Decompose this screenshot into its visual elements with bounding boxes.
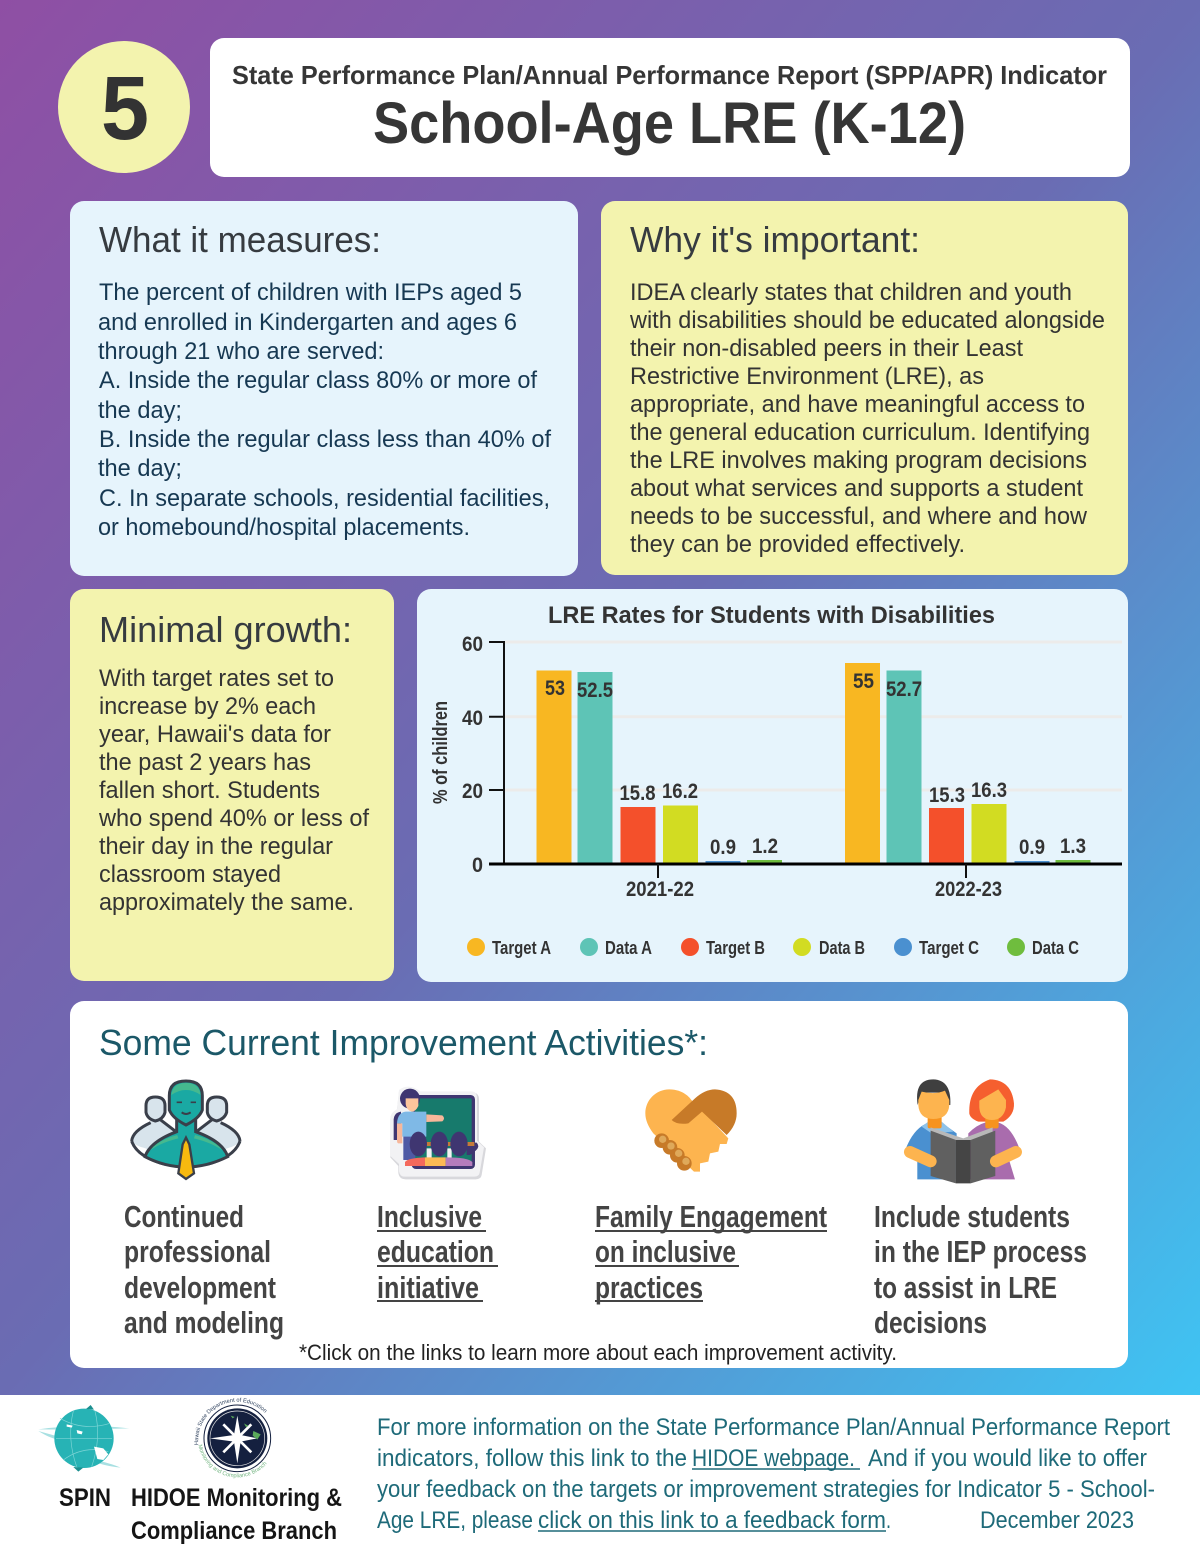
footer information text: . bbox=[886, 1507, 891, 1534]
data labels: 15.8 bbox=[620, 782, 656, 805]
panel: what it measures: and enrolled in Kindergarten and ages 6 bbox=[98, 309, 517, 336]
data labels: 53 bbox=[545, 677, 565, 700]
activity: professional development: and modeling bbox=[124, 1305, 284, 1340]
activity: include students bbox=[874, 1199, 1087, 1340]
data labels: 1.2 bbox=[752, 835, 778, 858]
legend: Target C bbox=[919, 938, 979, 958]
activity: family engagement: Family Engagement bbox=[595, 1199, 827, 1234]
footer information text: December 2023 bbox=[980, 1507, 1134, 1534]
y axis: 60 bbox=[462, 633, 483, 656]
activity: inclusive education: Inclusive bbox=[377, 1199, 482, 1234]
activity: include students: in the IEP process bbox=[874, 1234, 1087, 1269]
activity: inclusive education bbox=[377, 1199, 498, 1305]
legend: Target B bbox=[706, 938, 765, 958]
activity: family engagement: on inclusive bbox=[595, 1234, 736, 1269]
panel: what it measures: the day; bbox=[98, 397, 182, 424]
panel: why it's important: Why it's important: bbox=[630, 219, 920, 260]
panel: why it's important: needs to be successful, and where and how bbox=[630, 503, 1088, 530]
data labels: 55 bbox=[853, 670, 874, 693]
footer information text: HIDOE webpage. bbox=[692, 1445, 855, 1472]
panel: why it's important: Restrictive Environment (LRE), as bbox=[630, 363, 984, 390]
panel: why it's important: the general education curriculum. Identifying bbox=[630, 419, 1090, 446]
activity: professional development: professional bbox=[124, 1234, 271, 1269]
activity: include students: to assist in LRE bbox=[874, 1270, 1057, 1305]
logo labels: HIDOE Monitoring & bbox=[131, 1484, 342, 1512]
data labels: 15.3 bbox=[929, 784, 965, 807]
indicator number badge bbox=[58, 41, 190, 173]
indicator number badge: 5 bbox=[101, 59, 149, 159]
y axis bbox=[430, 633, 504, 877]
logo labels: SPIN bbox=[59, 1484, 111, 1512]
icon: heart handshake bbox=[645, 1089, 737, 1172]
icon: teacher and students bbox=[390, 1087, 486, 1179]
panel: minimal growth: Minimal growth: bbox=[99, 609, 352, 650]
y axis: 20 bbox=[462, 780, 483, 803]
activity: family engagement bbox=[595, 1199, 827, 1305]
legend: Data B bbox=[819, 938, 865, 958]
panel: minimal growth: classroom stayed bbox=[99, 861, 281, 888]
panel: why it's important: appropriate, and have meaningful access to bbox=[630, 391, 1085, 418]
activity: inclusive education: education bbox=[377, 1234, 494, 1269]
footer information text: Age LRE, please bbox=[377, 1507, 533, 1534]
icon: professional group bbox=[132, 1081, 240, 1179]
panel: why it's important: their non-disabled peers in their Least bbox=[630, 335, 1023, 362]
logo: HIDOE seal: Hawaii State Department of Education bbox=[194, 1398, 266, 1445]
panel: minimal growth bbox=[70, 589, 394, 981]
legend: Target A bbox=[492, 938, 551, 958]
data labels: 52.5 bbox=[577, 679, 613, 702]
legend: Data C bbox=[1032, 938, 1079, 958]
footer bbox=[38, 1398, 1170, 1545]
activity: family engagement: practices bbox=[595, 1270, 703, 1305]
activity: professional development bbox=[124, 1199, 284, 1340]
y axis: 40 bbox=[462, 707, 483, 730]
panel: what it measures: C. In separate schools, residential facilities, bbox=[99, 485, 550, 512]
panel: what it measures: or homebound/hospital placements. bbox=[98, 514, 470, 541]
logo: HIDOE seal bbox=[194, 1398, 272, 1478]
logo labels bbox=[59, 1484, 342, 1545]
panel: why it's important bbox=[601, 201, 1128, 575]
icon: two people reading a book bbox=[905, 1079, 1020, 1183]
legend bbox=[467, 938, 1079, 958]
data labels bbox=[545, 670, 1086, 859]
panel: why it's important: about what services and supports a student bbox=[630, 475, 1083, 502]
activity: include students: decisions bbox=[874, 1305, 987, 1340]
data labels: 0.9 bbox=[710, 836, 736, 859]
activities heading: Some Current Improvement Activities*: bbox=[99, 1022, 708, 1063]
panel: why it's important: they can be provided effectively. bbox=[630, 531, 965, 558]
panel: minimal growth: year, Hawaii's data for bbox=[99, 721, 331, 748]
footer information text bbox=[377, 1414, 1170, 1534]
x axis: 2022-23 bbox=[935, 878, 1002, 901]
title banner: School-Age LRE (K-12) bbox=[373, 91, 966, 156]
x axis: 2021-22 bbox=[626, 878, 694, 901]
data labels: 52.7 bbox=[886, 678, 922, 701]
panel: minimal growth: fallen short. Students bbox=[99, 777, 320, 804]
panel: what it measures: B. Inside the regular class less than 40% of bbox=[99, 426, 551, 453]
footnote: *Click on the links to learn more about each improvement activity. bbox=[299, 1340, 897, 1365]
logo: HIDOE seal: Monitoring and Compliance Branch bbox=[198, 1444, 267, 1478]
panel: what it measures: the day; bbox=[98, 455, 182, 482]
panel: minimal growth: their day in the regular bbox=[99, 833, 333, 860]
panel: why it's important: IDEA clearly states that children and youth bbox=[630, 279, 1072, 306]
bars 2021-22 bbox=[536, 670, 782, 864]
logo labels: Compliance Branch bbox=[131, 1517, 337, 1545]
panel: why it's important: the LRE involves making program decisions bbox=[630, 447, 1087, 474]
panel: minimal growth: increase by 2% each bbox=[99, 693, 316, 720]
title banner bbox=[210, 38, 1130, 177]
bars 2022-23 bbox=[845, 663, 1090, 864]
footer information text: click on this link to a feedback form bbox=[538, 1507, 886, 1534]
data labels: 16.3 bbox=[971, 779, 1007, 802]
activity: inclusive education: initiative bbox=[377, 1270, 479, 1305]
chart title: LRE Rates for Students with Disabilities bbox=[548, 602, 995, 629]
panel: what it measures: The percent of children with IEPs aged 5 bbox=[99, 279, 522, 306]
footer information text: your feedback on the targets or improvement strategies for Indicator 5 - School- bbox=[377, 1476, 1155, 1503]
panel: bar chart bbox=[417, 589, 1128, 982]
footer information text: indicators, follow this link to the bbox=[377, 1445, 687, 1472]
y axis: % of children bbox=[430, 701, 452, 804]
panel: improvement activities bbox=[70, 1001, 1128, 1368]
panel: minimal growth: approximately the same. bbox=[99, 889, 354, 916]
panel: what it measures: through 21 who are served: bbox=[98, 338, 384, 365]
panel: what it measures: What it measures: bbox=[99, 219, 381, 260]
data labels: 16.2 bbox=[662, 780, 698, 803]
activity: professional development: development bbox=[124, 1270, 276, 1305]
panel: what it measures: A. Inside the regular class 80% or more of bbox=[99, 367, 537, 394]
activity: professional development: Continued bbox=[124, 1199, 244, 1234]
title banner: State Performance Plan/Annual Performance Report (SPP/APR) Indicator bbox=[232, 60, 1107, 90]
panel: minimal growth: the past 2 years has bbox=[99, 749, 311, 776]
x axis bbox=[489, 864, 1122, 901]
panel: minimal growth: who spend 40% or less of bbox=[98, 805, 369, 832]
data labels: 1.3 bbox=[1060, 835, 1086, 858]
footer information text: And if you would like to offer bbox=[868, 1445, 1147, 1472]
panel: why it's important: with disabilities should be educated alongside bbox=[629, 307, 1105, 334]
data labels: 0.9 bbox=[1019, 836, 1045, 859]
logo: SPIN globe bbox=[38, 1405, 129, 1472]
y axis: 0 bbox=[472, 854, 483, 877]
panel: minimal growth: With target rates set to bbox=[99, 665, 334, 692]
activity: include students: Include students bbox=[874, 1199, 1070, 1234]
panel: what it measures bbox=[70, 201, 578, 576]
legend: Data A bbox=[605, 938, 652, 958]
